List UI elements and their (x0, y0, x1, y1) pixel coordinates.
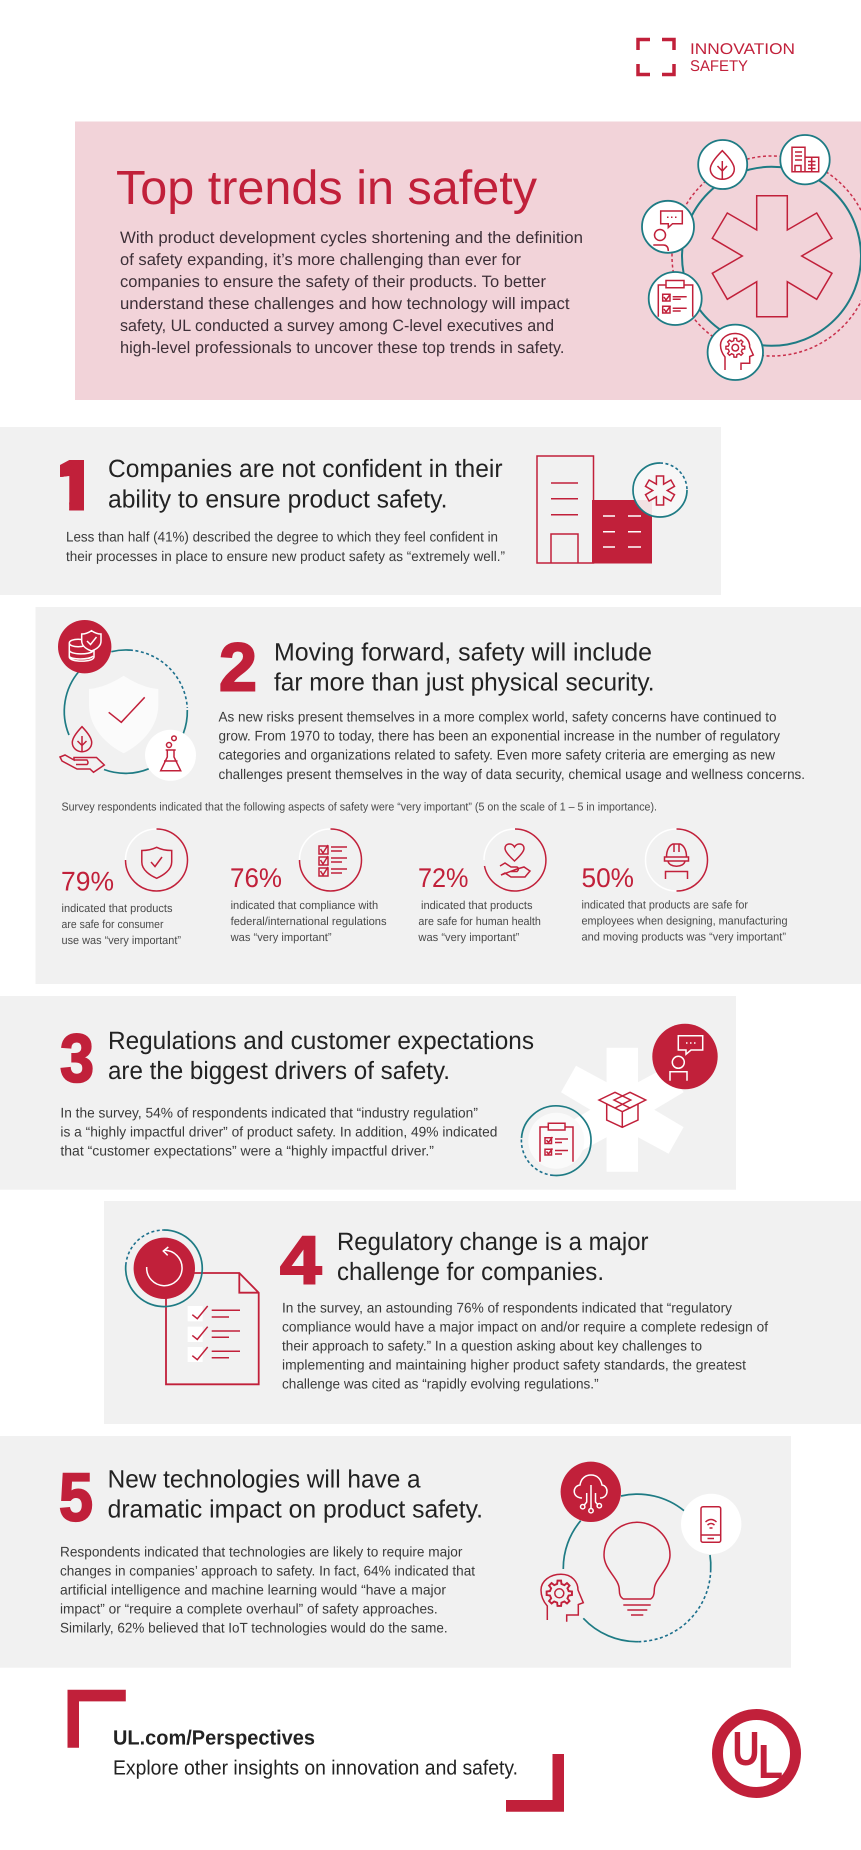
number 5: 5 (59, 1460, 93, 1536)
icon: clipboard in ring (521, 1106, 591, 1175)
text 4: In the survey, an astounding 76% of respondents indicated that “regulatory (282, 1300, 732, 1316)
caption: and moving products was “very important” (582, 932, 786, 944)
stat: 50%: 50% (582, 863, 634, 893)
survey note: Survey respondents indicated that the following aspects of safety were “very important” (5 on the scale of 1 – 5 in importance). (62, 802, 657, 814)
text 2 (218, 709, 805, 782)
caption: use was “very important” (62, 935, 181, 947)
text 2: grow. From 1970 to today, there has been an exponential increase in the number of regulatory (218, 728, 780, 744)
caption: indicated that products (421, 900, 533, 912)
heading 4: Regulatory change is a major (337, 1228, 648, 1256)
text 3 (60, 1104, 497, 1158)
heading 1: ability to ensure product safety. (108, 486, 448, 514)
icon: heart and hand in ring (484, 829, 546, 891)
icon: hand with leaf (60, 727, 104, 772)
heading 4 (337, 1228, 648, 1286)
heading 1: Companies are not confident in their (108, 455, 502, 483)
text 5 (60, 1544, 475, 1636)
icon: head with gear (708, 325, 763, 380)
panel: trend 5 (0, 1436, 791, 1668)
icon: clipboard (649, 272, 702, 325)
stat: 76%: 76% (230, 863, 282, 893)
panel: intro (75, 122, 861, 400)
caption (230, 900, 387, 944)
heading 3: are the biggest drivers of safety. (108, 1057, 450, 1085)
text 2: challenges present themselves in the way of data security, chemical usage and wellness concerns. (218, 766, 805, 782)
text 5: changes in companies’ approach to safety. In fact, 64% indicated that (60, 1563, 475, 1579)
heading 5: dramatic impact on product safety. (108, 1496, 483, 1524)
heading 2 (274, 639, 654, 697)
stat: 72%: 72% (418, 863, 468, 893)
heading 3: Regulations and customer expectations (108, 1027, 534, 1055)
icon: data shield (58, 620, 111, 673)
tagline: Explore other insights on innovation and safety. (113, 1756, 518, 1779)
text 2: As new risks present themselves in a more complex world, safety concerns have continued to (218, 709, 777, 725)
number 3: 3 (60, 1021, 94, 1097)
stat: 76% (230, 829, 387, 944)
stat: 72% (417, 829, 546, 944)
number 2: 2 (219, 630, 257, 706)
text 5: Respondents indicated that technologies are likely to require major (60, 1544, 463, 1560)
intro text: understand these challenges and how technology will impact (120, 295, 570, 313)
stat: 50% (582, 829, 788, 944)
text 1 (66, 529, 505, 564)
icon: smartphone (681, 1494, 741, 1554)
intro text: safety, UL conducted a survey among C-level executives and (120, 317, 554, 335)
caption: are safe for consumer (62, 919, 164, 931)
footer call to action (68, 1690, 564, 1812)
heading 1 (108, 455, 502, 514)
text 5: Similarly, 62% believed that IoT technologies would do the same. (60, 1620, 448, 1636)
caption (582, 900, 788, 944)
logo: UL: L (758, 1736, 783, 1789)
icon: cloud network (561, 1462, 621, 1522)
icon: person with chat (652, 1024, 718, 1089)
text 4 (282, 1300, 768, 1392)
logo: UL (718, 1714, 796, 1792)
intro text: of safety expanding, it’s more challenging than ever for (120, 251, 521, 269)
number 4: 4 (280, 1223, 322, 1299)
caption: was “very important” (230, 932, 332, 944)
icon: box (599, 1092, 646, 1127)
stat: 79% (61, 829, 188, 947)
caption (62, 903, 181, 947)
title: Top trends in safety (116, 162, 537, 215)
text 1: Less than half (41%) described the degree to which they feel confident in (66, 529, 498, 545)
text 2: categories and organizations related to safety. Even more safety criteria are emerging as new (218, 747, 776, 763)
number 1: 1 (57, 449, 95, 525)
text 1: their processes in place to ensure new product safety as “extremely well.” (66, 548, 505, 564)
panel: trend 1 (0, 427, 721, 595)
number 1 (60, 460, 84, 510)
icon: shield with ring (58, 620, 196, 781)
heading 2: Moving forward, safety will include (274, 639, 652, 667)
intro text: companies to ensure the safety of their products. To better (120, 273, 546, 291)
caption: federal/international regulations (231, 916, 387, 928)
icon: worker in ring (646, 829, 708, 891)
text 5: impact” or “require a complete overhaul” of safety approaches. (60, 1601, 438, 1617)
text 3: In the survey, 54% of respondents indicated that “industry regulation” (60, 1104, 478, 1120)
logo: innovation safety (638, 40, 795, 75)
logo: innovation safety: INNOVATION (690, 41, 795, 58)
icon: white star with box, chat and clipboard (521, 1024, 718, 1175)
icon: light bulb with ring of technology icons (541, 1462, 741, 1642)
heading 2: far more than just physical security. (274, 669, 654, 697)
panel: trend 2 (36, 607, 861, 984)
heading 5: New technologies will have a (108, 1466, 421, 1494)
caption (417, 900, 541, 944)
intro text: With product development cycles shortening and the definition (120, 229, 583, 247)
bracket: bottom right (506, 1754, 564, 1812)
caption: was “very important” (417, 932, 520, 944)
heading 3 (108, 1027, 534, 1085)
caption: are safe for human health (418, 916, 541, 928)
text 4: compliance would have a major impact on and/or require a complete redesign of (282, 1319, 768, 1335)
icon: safety star with ring of icons (642, 135, 861, 380)
caption: indicated that products are safe for (582, 900, 748, 912)
panel: trend 3 (0, 996, 736, 1190)
caption: indicated that compliance with (231, 900, 378, 912)
icon: person with chat (642, 201, 694, 253)
text 3: that “customer expectations” were a “highly impactful driver.” (60, 1142, 434, 1158)
icon: leaf (698, 140, 747, 189)
link text: UL.com/Perspectives (113, 1726, 315, 1749)
text 4: their approach to safety.” In a question asking about key challenges to (282, 1338, 702, 1354)
heading 5 (108, 1466, 483, 1524)
icon: head with gear (541, 1574, 583, 1622)
intro text: high-level professionals to uncover these top trends in safety. (120, 339, 564, 357)
intro text (120, 229, 583, 357)
text 4: implementing and maintaining higher product safety standards, the greatest (282, 1357, 746, 1373)
caption: indicated that products (62, 903, 173, 915)
text 5: artificial intelligence and machine learning would “have a major (60, 1582, 446, 1598)
icon: building (780, 135, 830, 184)
heading 4: challenge for companies. (337, 1258, 604, 1286)
logo: innovation safety: SAFETY (690, 58, 748, 75)
text 3: is a “highly impactful driver” of product safety. In addition, 49% indicated (60, 1123, 497, 1139)
icon: flask (145, 730, 196, 781)
logo: UL: U (732, 1723, 760, 1776)
icon: document with refresh (126, 1230, 259, 1384)
icon: checklist in ring (300, 829, 362, 891)
stat: 79%: 79% (61, 867, 114, 897)
panel: trend 4 (104, 1201, 861, 1424)
icon: shield in ring (126, 829, 188, 891)
bracket: top left (68, 1690, 126, 1748)
text 4: challenge was cited as “rapidly evolving regulations.” (282, 1376, 599, 1392)
icon: buildings with star (537, 456, 687, 564)
caption: employees when designing, manufacturing (582, 916, 788, 928)
